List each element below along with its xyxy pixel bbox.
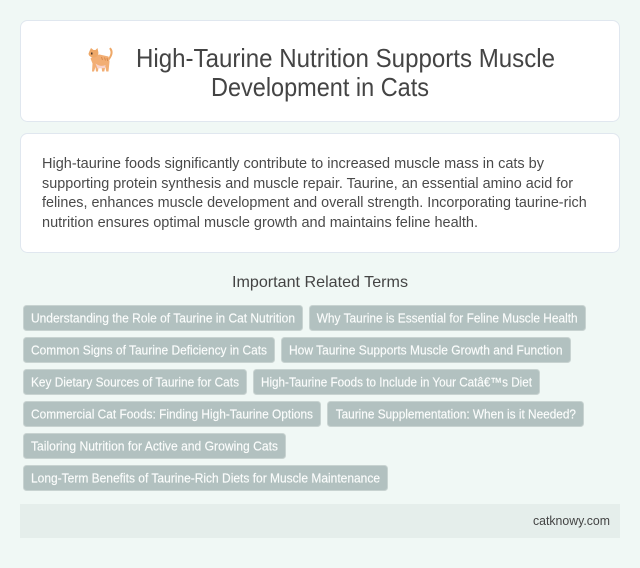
title: High-Taurine Nutrition Supports Muscle	[136, 45, 555, 73]
tag	[328, 402, 584, 426]
tag	[310, 306, 586, 330]
footer text: catknowy.com	[533, 513, 610, 528]
tag: Key Dietary Sources of Taurine for Cats	[31, 376, 239, 390]
tag: Commercial Cat Foods: Finding High-Taurine Options	[31, 408, 313, 422]
text block: description: nutrition ensures optimal muscle growth and maintains feline health.	[42, 215, 478, 231]
tag	[24, 434, 286, 458]
tag: Understanding the Role of Taurine in Cat Nutrition	[31, 312, 295, 326]
tag	[254, 370, 540, 394]
tag	[24, 338, 274, 362]
tag: Why Taurine is Essential for Feline Muscle Health	[317, 312, 578, 326]
tag: Long-Term Benefits of Taurine-Rich Diets for Muscle Maintenance	[31, 472, 380, 486]
tag: Common Signs of Taurine Deficiency in Cats	[31, 344, 267, 358]
tag: Tailoring Nutrition for Active and Growing Cats	[31, 440, 278, 454]
icon: cat	[88, 48, 113, 72]
panel: description	[20, 134, 620, 252]
heading: important related terms: Important Related Terms	[232, 274, 408, 291]
tag list	[24, 306, 586, 490]
title: Development in Cats	[211, 74, 429, 102]
tag	[24, 466, 388, 490]
tag	[282, 338, 570, 362]
panel: title card	[20, 20, 620, 122]
footer	[20, 504, 620, 538]
tag: High-Taurine Foods to Include in Your Catâ€™s Diet	[261, 376, 532, 390]
text block: description: supporting protein synthesis and muscle repair. Taurine, an essential amino acid for	[42, 176, 573, 192]
tag	[24, 370, 246, 394]
tag	[24, 402, 320, 426]
tag: Taurine Supplementation: When is it Needed?	[336, 408, 576, 422]
text block: description: felines, enhances muscle development and overall strength. Incorporating taurine-rich	[42, 195, 587, 211]
text block: description: High-taurine foods significantly contribute to increased muscle mass in cats by	[42, 156, 545, 172]
tag: How Taurine Supports Muscle Growth and Function	[289, 344, 563, 358]
tag	[24, 306, 302, 330]
